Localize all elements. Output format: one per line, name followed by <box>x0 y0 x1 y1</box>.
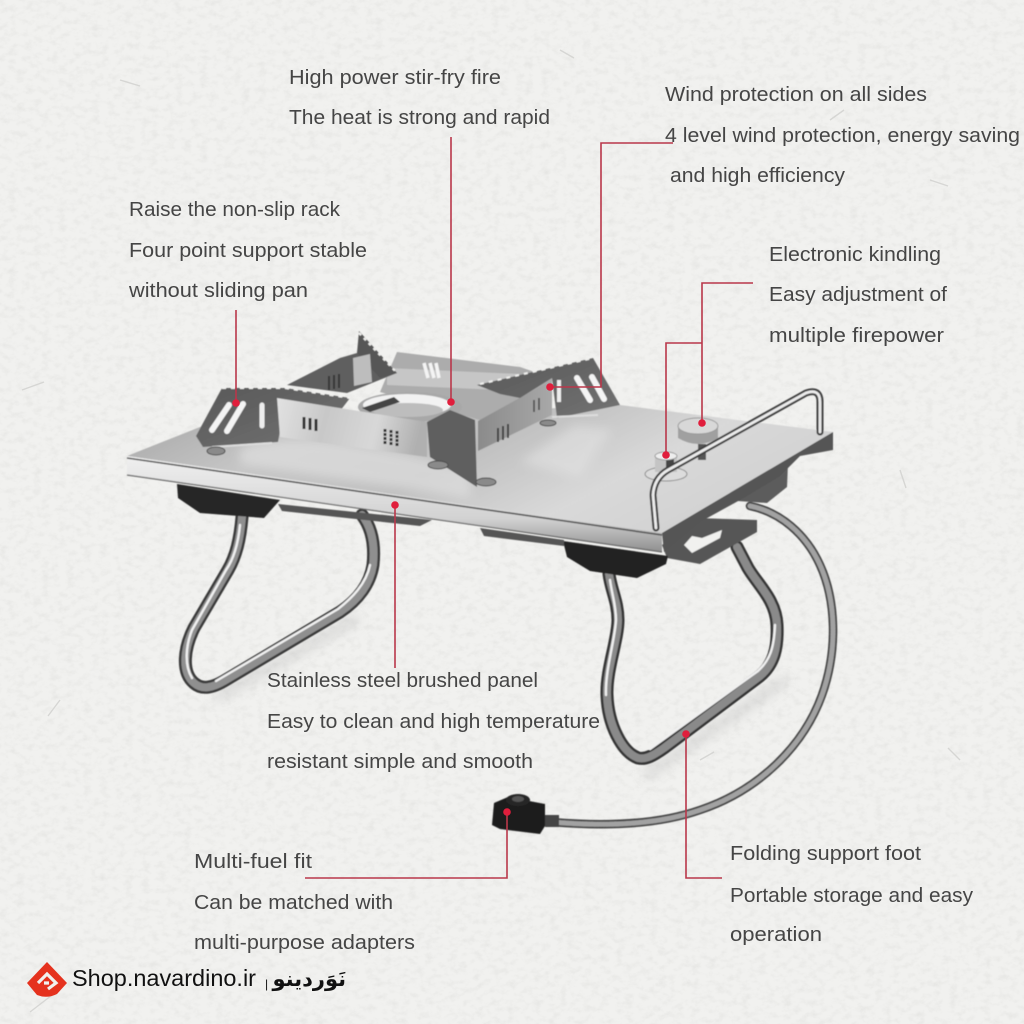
text: stir-fry fire: The heat is strong and rapid <box>289 107 550 129</box>
text: wind protection: Wind protection on all sides <box>665 84 927 106</box>
text: electronic kindling: Electronic kindling <box>769 244 941 266</box>
left folding leg <box>185 515 374 687</box>
text: stainless panel: resistant simple and smooth <box>267 751 533 773</box>
text: multi-fuel: Multi-fuel fit <box>194 851 313 873</box>
text: stainless panel <box>267 670 600 773</box>
logo: shop brand <box>27 962 346 997</box>
ignition button <box>645 452 687 481</box>
callout: stainless panel <box>394 505 396 668</box>
firepower knob <box>678 418 718 460</box>
text: stainless panel: Stainless steel brushed panel <box>267 670 538 692</box>
left mounting block <box>177 484 280 518</box>
text: wind protection: 4 level wind protection, energy saving <box>665 125 1020 147</box>
callout end dots <box>232 383 706 816</box>
callout: wind protection <box>551 143 673 387</box>
callout: non-slip rack <box>235 310 237 403</box>
text: wind protection: and high efficiency <box>670 165 845 187</box>
text: multi-fuel: multi-purpose adapters <box>194 932 415 954</box>
brand name: Shop.navardino.ir <box>72 965 256 991</box>
callout lines and dots <box>232 137 753 878</box>
text: multi-fuel: Can be matched with <box>194 892 393 914</box>
carry handle <box>653 392 820 528</box>
gas connector <box>492 794 559 834</box>
text: non-slip rack: Four point support stable <box>129 240 367 262</box>
text: non-slip rack: without sliding pan <box>128 280 308 302</box>
text: folding foot: Folding support foot <box>730 843 921 865</box>
burner <box>358 392 462 422</box>
callout: multi-fuel <box>305 812 507 878</box>
separator: | <box>265 977 268 991</box>
right windscreen side panel <box>478 380 552 451</box>
front windscreen panel <box>277 398 427 457</box>
callout: folding foot <box>686 734 722 878</box>
persian brand name: نَوَردینو <box>271 967 346 991</box>
text: non-slip rack: Raise the non-slip rack <box>129 199 341 221</box>
stove product illustration <box>127 331 833 834</box>
under-plate rail <box>278 504 564 546</box>
windscreen rear panels <box>287 331 552 420</box>
callout: electronic kindling <box>666 283 753 455</box>
text: stainless panel: Easy to clean and high temperature <box>267 711 600 733</box>
text: stir-fry fire: High power stir-fry fire <box>289 67 501 89</box>
text: electronic kindling: Easy adjustment of <box>769 284 947 306</box>
text: folding foot: operation <box>730 924 822 946</box>
mounting screws <box>207 420 556 486</box>
text: folding foot <box>730 843 973 946</box>
side block under right edge <box>723 463 788 503</box>
bracket under right side <box>662 518 757 564</box>
text: electronic kindling: multiple firepower <box>769 325 944 347</box>
right mounting block <box>563 541 668 578</box>
text: folding foot: Portable storage and easy <box>730 885 973 907</box>
text: multi-fuel <box>194 851 415 954</box>
callout: stir-fry fire <box>450 137 452 402</box>
right folding leg <box>606 547 777 758</box>
stainless steel plate <box>127 405 833 552</box>
text: wind protection <box>665 84 1020 187</box>
text: non-slip rack <box>128 199 367 302</box>
gas hose <box>552 506 833 824</box>
icon: red house mark <box>27 962 67 997</box>
text: stir-fry fire <box>289 67 550 129</box>
right serrated wing <box>477 358 620 418</box>
left serrated wing <box>196 388 350 447</box>
leg shadows <box>215 618 785 776</box>
text: electronic kindling <box>769 244 947 347</box>
corner dark wing panel <box>427 410 477 487</box>
